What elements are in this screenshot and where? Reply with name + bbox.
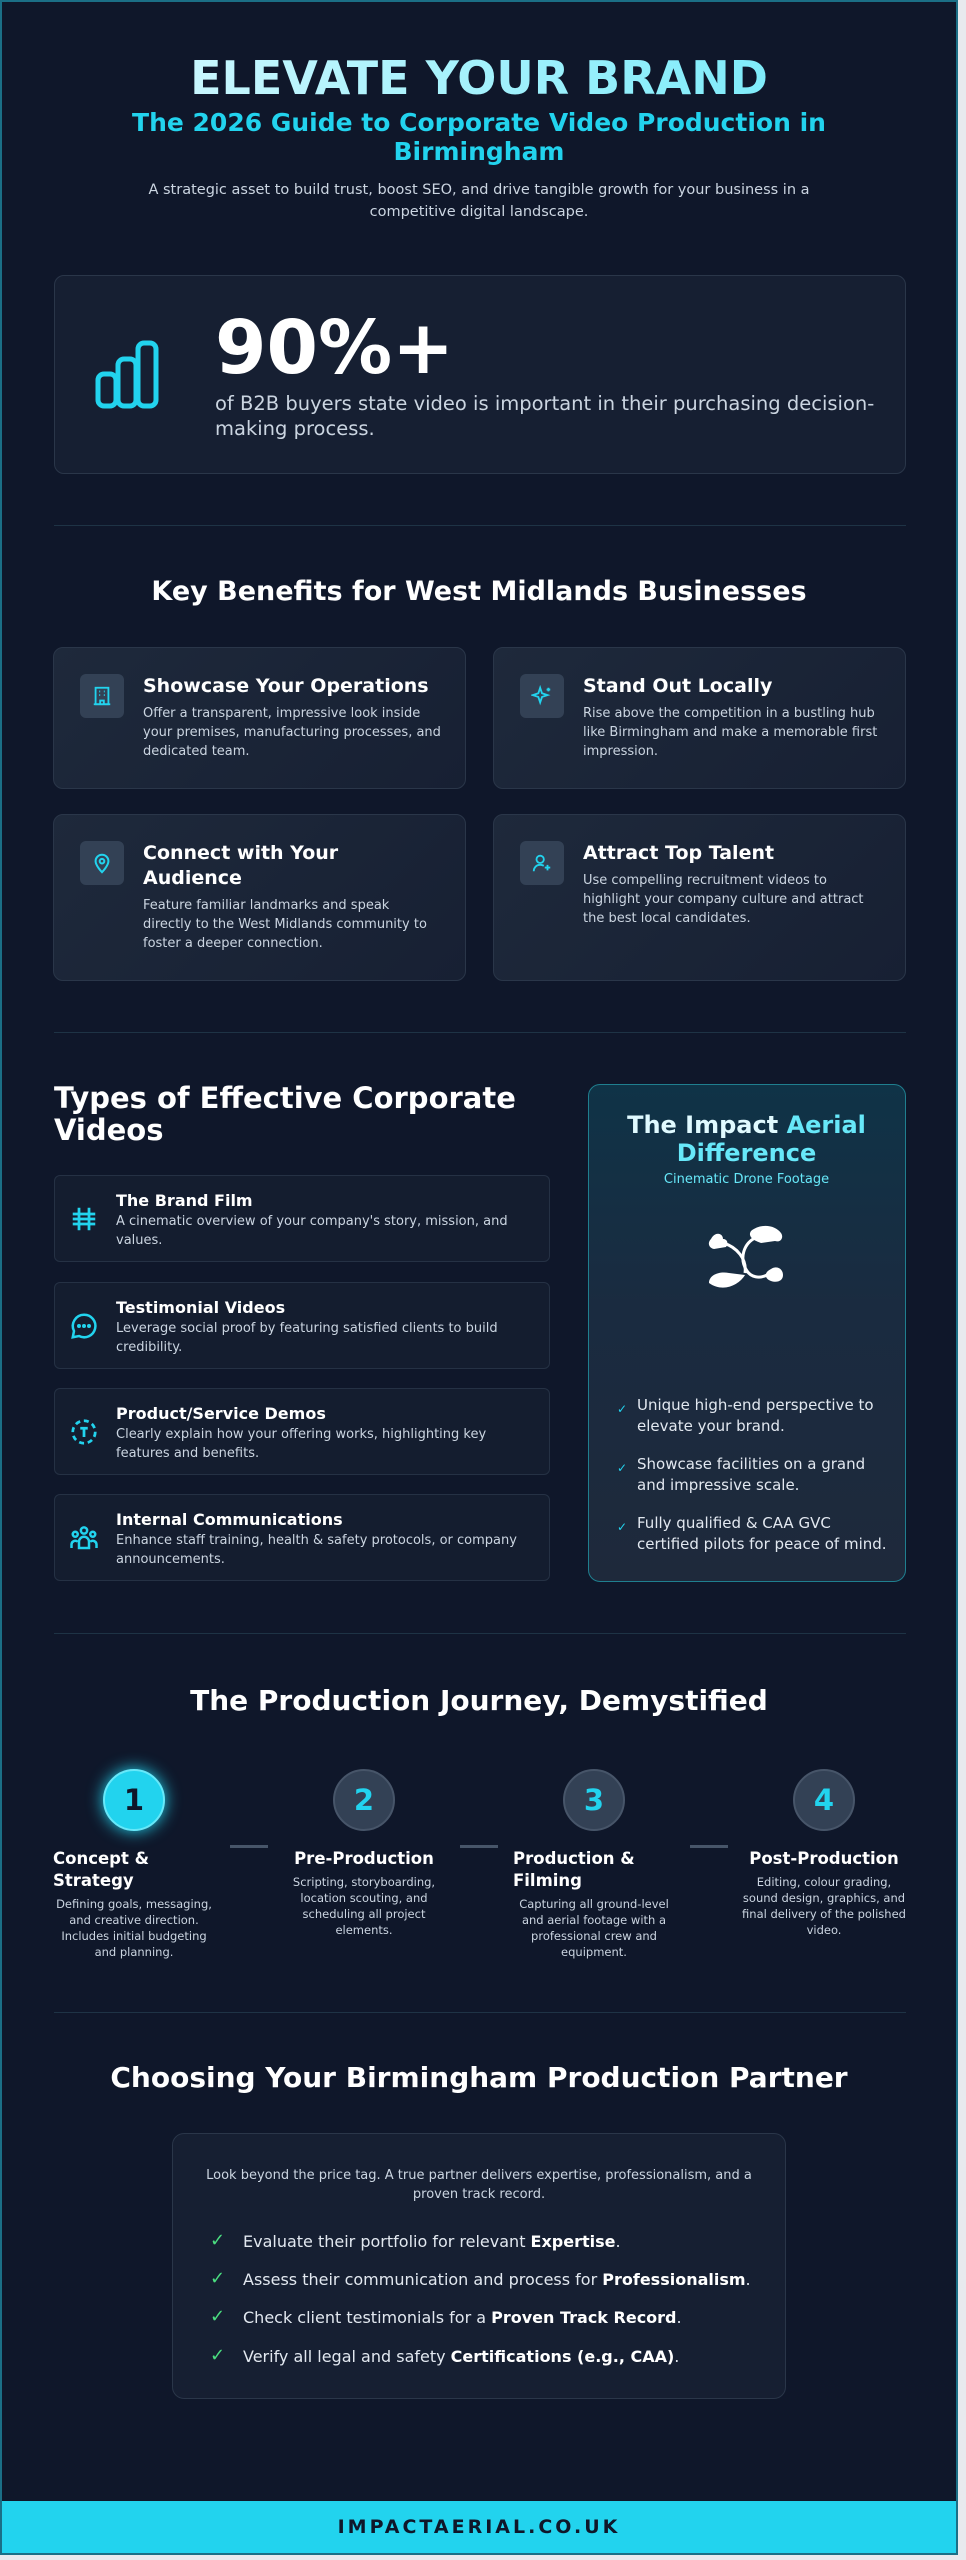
benefit: stand out (493, 647, 906, 789)
stat card (54, 275, 906, 474)
video: brand film (54, 1175, 550, 1262)
benefit: connect: Feature familiar landmarks and speak directly to the West Midlands community to foster a deeper connection. (143, 898, 427, 951)
step 2: Scripting, storyboarding, location scouting, and scheduling all project elements. (293, 1875, 435, 1937)
benefit: connect: Connect with Your Audience (143, 842, 338, 889)
video: internal comms: Internal Communications (116, 1510, 343, 1529)
benefit: operations: Showcase Your Operations (143, 675, 429, 697)
icon: focus (71, 1419, 97, 1445)
check list: ✓ (617, 1520, 627, 1534)
step 3 (513, 1769, 669, 1959)
heading: production journey: The Production Journey, Demystified (190, 1684, 768, 1717)
check list: ✓ (617, 1402, 627, 1416)
benefit: operations (53, 647, 466, 789)
video: testimonial: Testimonial Videos (116, 1298, 285, 1317)
step 1: Concept & (53, 1849, 149, 1868)
icon: chat bubble (71, 1314, 97, 1339)
stat description: of B2B buyers state video is important in their purchasing decision-making process. (215, 392, 874, 440)
heading: key benefits: Key Benefits for West Midlands Businesses (151, 576, 807, 607)
benefit: operations: Offer a transparent, impressive look inside your premises, manufacturing processes, and dedicated team. (143, 706, 441, 759)
footer (2, 2501, 956, 2553)
arrow connector (460, 1845, 498, 1848)
step 1: Strategy (53, 1871, 134, 1890)
video: demos (54, 1388, 550, 1475)
benefit: talent (493, 814, 906, 981)
step 4: Editing, colour grading, sound design, graphics, and final delivery of the polished video. (742, 1875, 906, 1937)
benefit: stand out: Stand Out Locally (583, 675, 772, 697)
check list (617, 1396, 887, 1553)
icon: map pin (80, 841, 124, 885)
step 3: 3 (584, 1783, 604, 1817)
intro text: A strategic asset to build trust, boost SEO, and drive tangible growth for your business in a competitive digital landscape. (148, 182, 810, 220)
icon: drone (708, 1226, 783, 1288)
step 2 (293, 1769, 435, 1937)
video: demos: Clearly explain how your offering works, highlighting key features and benefits. (116, 1427, 486, 1461)
step 1 (53, 1756, 212, 1959)
intro text: Look beyond the price tag. A true partner delivers expertise, professionalism, and a proven track record. (206, 2168, 752, 2202)
step 3: Capturing all ground-level and aerial footage with a professional crew and equipment. (519, 1897, 669, 1959)
video: demos: Product/Service Demos (116, 1404, 326, 1423)
title: ELEVATE YOUR BRAND (190, 51, 768, 105)
step 3: Filming (513, 1871, 582, 1890)
arrow connector (690, 1845, 728, 1848)
checklist: Evaluate their portfolio for relevant Expertise. (243, 2232, 621, 2251)
benefit: talent: Attract Top Talent (583, 842, 774, 864)
checklist: ✓ (210, 2230, 225, 2251)
check list: Fully qualified & CAA GVC certified pilots for peace of mind. (637, 1514, 887, 1553)
heading: types of videos: Types of Effective Corporate Videos (54, 1081, 516, 1147)
icon: building (80, 674, 124, 718)
footer: IMPACTAERIAL.CO.UK (338, 2516, 620, 2538)
heading: choosing partner: Choosing Your Birmingham Production Partner (110, 2061, 848, 2094)
checklist: Assess their communication and process for Professionalism. (243, 2270, 751, 2289)
icon: sparkle (520, 674, 564, 718)
video: internal comms: Enhance staff training, health & safety protocols, or company announcements. (116, 1533, 517, 1567)
benefit: talent: Use compelling recruitment videos to highlight your company culture and attract the best local candidates. (583, 873, 864, 926)
check list: Showcase facilities on a grand and impressive scale. (637, 1455, 865, 1494)
subtitle: The 2026 Guide to Corporate Video Production in Birmingham (132, 108, 826, 166)
checklist (210, 2230, 751, 2366)
step 4 (742, 1769, 906, 1937)
panel subtitle: Cinematic Drone Footage (664, 1172, 829, 1187)
icon: add user (520, 841, 564, 885)
video: brand film: The Brand Film (116, 1191, 253, 1210)
step 2: Pre-Production (294, 1849, 434, 1868)
step 4: Post-Production (749, 1849, 899, 1868)
video: internal comms (54, 1494, 550, 1581)
checklist: ✓ (210, 2345, 225, 2366)
video: testimonial: Leverage social proof by featuring satisfied clients to build credibility. (116, 1321, 498, 1355)
step 1: Defining goals, messaging, and creative direction. Includes initial budgeting and planning. (56, 1897, 212, 1959)
panel: impact aerial difference (588, 1084, 906, 1582)
checklist: ✓ (210, 2306, 225, 2327)
step 1: 1 (124, 1783, 144, 1817)
step 4: 4 (814, 1783, 834, 1817)
arrow connector (230, 1845, 268, 1848)
panel: partner checklist (172, 2133, 786, 2399)
checklist: Check client testimonials for a Proven Track Record. (243, 2308, 682, 2327)
icon: bar chart (96, 340, 158, 408)
panel title: The Impact Aerial Difference (627, 1111, 866, 1167)
icon: film (72, 1208, 96, 1230)
icon: team (70, 1526, 98, 1550)
video: brand film: A cinematic overview of your company's story, mission, and values. (116, 1214, 508, 1248)
stat number: 90%+ (215, 305, 454, 391)
step 2: 2 (354, 1783, 374, 1817)
checklist: ✓ (210, 2268, 225, 2289)
benefit: stand out: Rise above the competition in a bustling hub like Birmingham and make a memorable first impression. (583, 706, 877, 759)
benefit: connect (53, 814, 466, 981)
check list: Unique high-end perspective to elevate your brand. (637, 1396, 874, 1435)
video: testimonial (54, 1282, 550, 1369)
step 3: Production & (513, 1849, 635, 1868)
title (2, 49, 956, 107)
checklist: Verify all legal and safety Certifications (e.g., CAA). (243, 2347, 679, 2366)
check list: ✓ (617, 1461, 627, 1475)
